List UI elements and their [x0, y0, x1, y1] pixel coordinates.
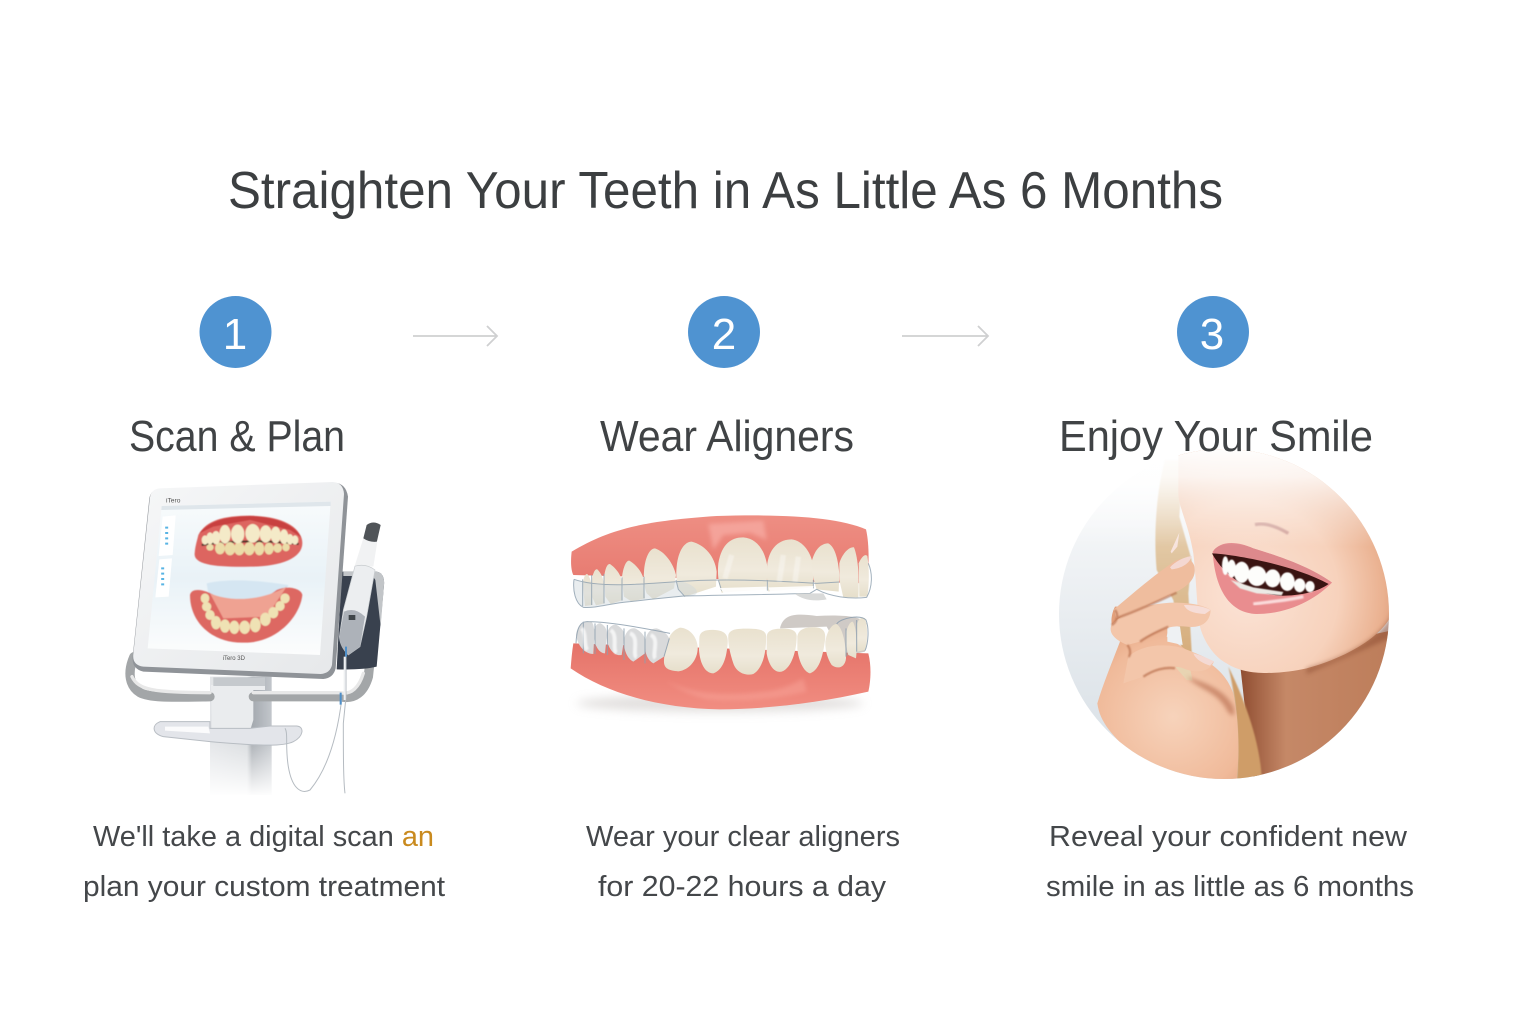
teeth [1222, 556, 1315, 595]
hair over neck [1228, 667, 1262, 780]
index finger [1114, 559, 1195, 618]
palm [1097, 607, 1238, 780]
arrow: step 2 to step 3 [902, 326, 988, 346]
number badge 1 [200, 296, 272, 368]
description: step 3: Reveal your confident new [1049, 821, 1408, 853]
panel: step 3 enjoy your smile [1046, 296, 1414, 903]
tray [154, 722, 302, 745]
arrow: step 1 to step 2 [413, 326, 497, 346]
face [1178, 447, 1393, 673]
panel: step 1 scan and plan [83, 296, 445, 903]
mouth [1212, 553, 1329, 596]
cables [285, 647, 346, 793]
stand column [210, 677, 272, 795]
scanner holder [337, 572, 384, 669]
palm shadow [1187, 677, 1234, 715]
nose shadow [1255, 524, 1288, 533]
heading: scan and plan: Scan & Plan [129, 412, 345, 461]
lower arch image [190, 580, 302, 643]
middle finger [1111, 603, 1211, 645]
lower aligner tray [576, 617, 868, 663]
back lower tray [780, 615, 867, 657]
heading: wear aligners: Wear Aligners [600, 412, 854, 461]
top fade to white [1156, 449, 1371, 540]
screen side panels [159, 515, 176, 556]
number badge 2 [688, 296, 760, 368]
lower teeth [664, 618, 867, 675]
nails [1170, 556, 1192, 569]
screen [148, 502, 331, 655]
description: step 3 [1046, 821, 1414, 903]
icon: intraoral scanner on stand [130, 482, 384, 797]
upper gum [571, 515, 869, 583]
title: Straighten Your Teeth in As Little As 6 Months [228, 162, 1223, 220]
description: step 1: plan your custom treatment [83, 871, 445, 903]
description: step 2 [586, 821, 900, 903]
number badge 3 [1177, 296, 1249, 368]
description: step 2: Wear your clear aligners [586, 821, 900, 853]
description: step 1 [83, 821, 445, 903]
hair [1154, 473, 1192, 652]
collar [211, 685, 265, 731]
photo: smiling woman [1053, 447, 1393, 783]
white gap between fingers [1167, 625, 1183, 645]
brand labels: iTero [166, 497, 181, 504]
backdrop [1059, 524, 1389, 779]
heading: enjoy your smile: Enjoy Your Smile [1059, 412, 1373, 461]
handle bar [130, 583, 378, 697]
lower left teeth under aligner [576, 622, 669, 663]
finger creases [1112, 593, 1177, 677]
upper aligner tray [574, 579, 697, 607]
icon: intraoral scanner on stand: iTero 3D [223, 656, 246, 662]
ring finger [1123, 645, 1214, 683]
description: step 1: We'll take a digital scan an [93, 821, 434, 853]
lips [1213, 543, 1332, 614]
upper arch image [195, 516, 302, 567]
number badge 2: 2 [712, 310, 736, 359]
panel: step 2 wear aligners [571, 296, 900, 903]
neck [1240, 630, 1393, 783]
lower gum [571, 643, 870, 709]
soft shadow [577, 695, 863, 712]
scanner wand [363, 522, 381, 543]
upper teeth [583, 537, 869, 606]
monitor [133, 483, 348, 679]
number badge 3: 3 [1200, 310, 1224, 359]
description: step 2: for 20-22 hours a day [598, 871, 887, 903]
description: step 3: smile in as little as 6 months [1046, 871, 1414, 903]
icon: teeth with clear aligners [571, 515, 871, 712]
number badge 1: 1 [223, 310, 247, 359]
